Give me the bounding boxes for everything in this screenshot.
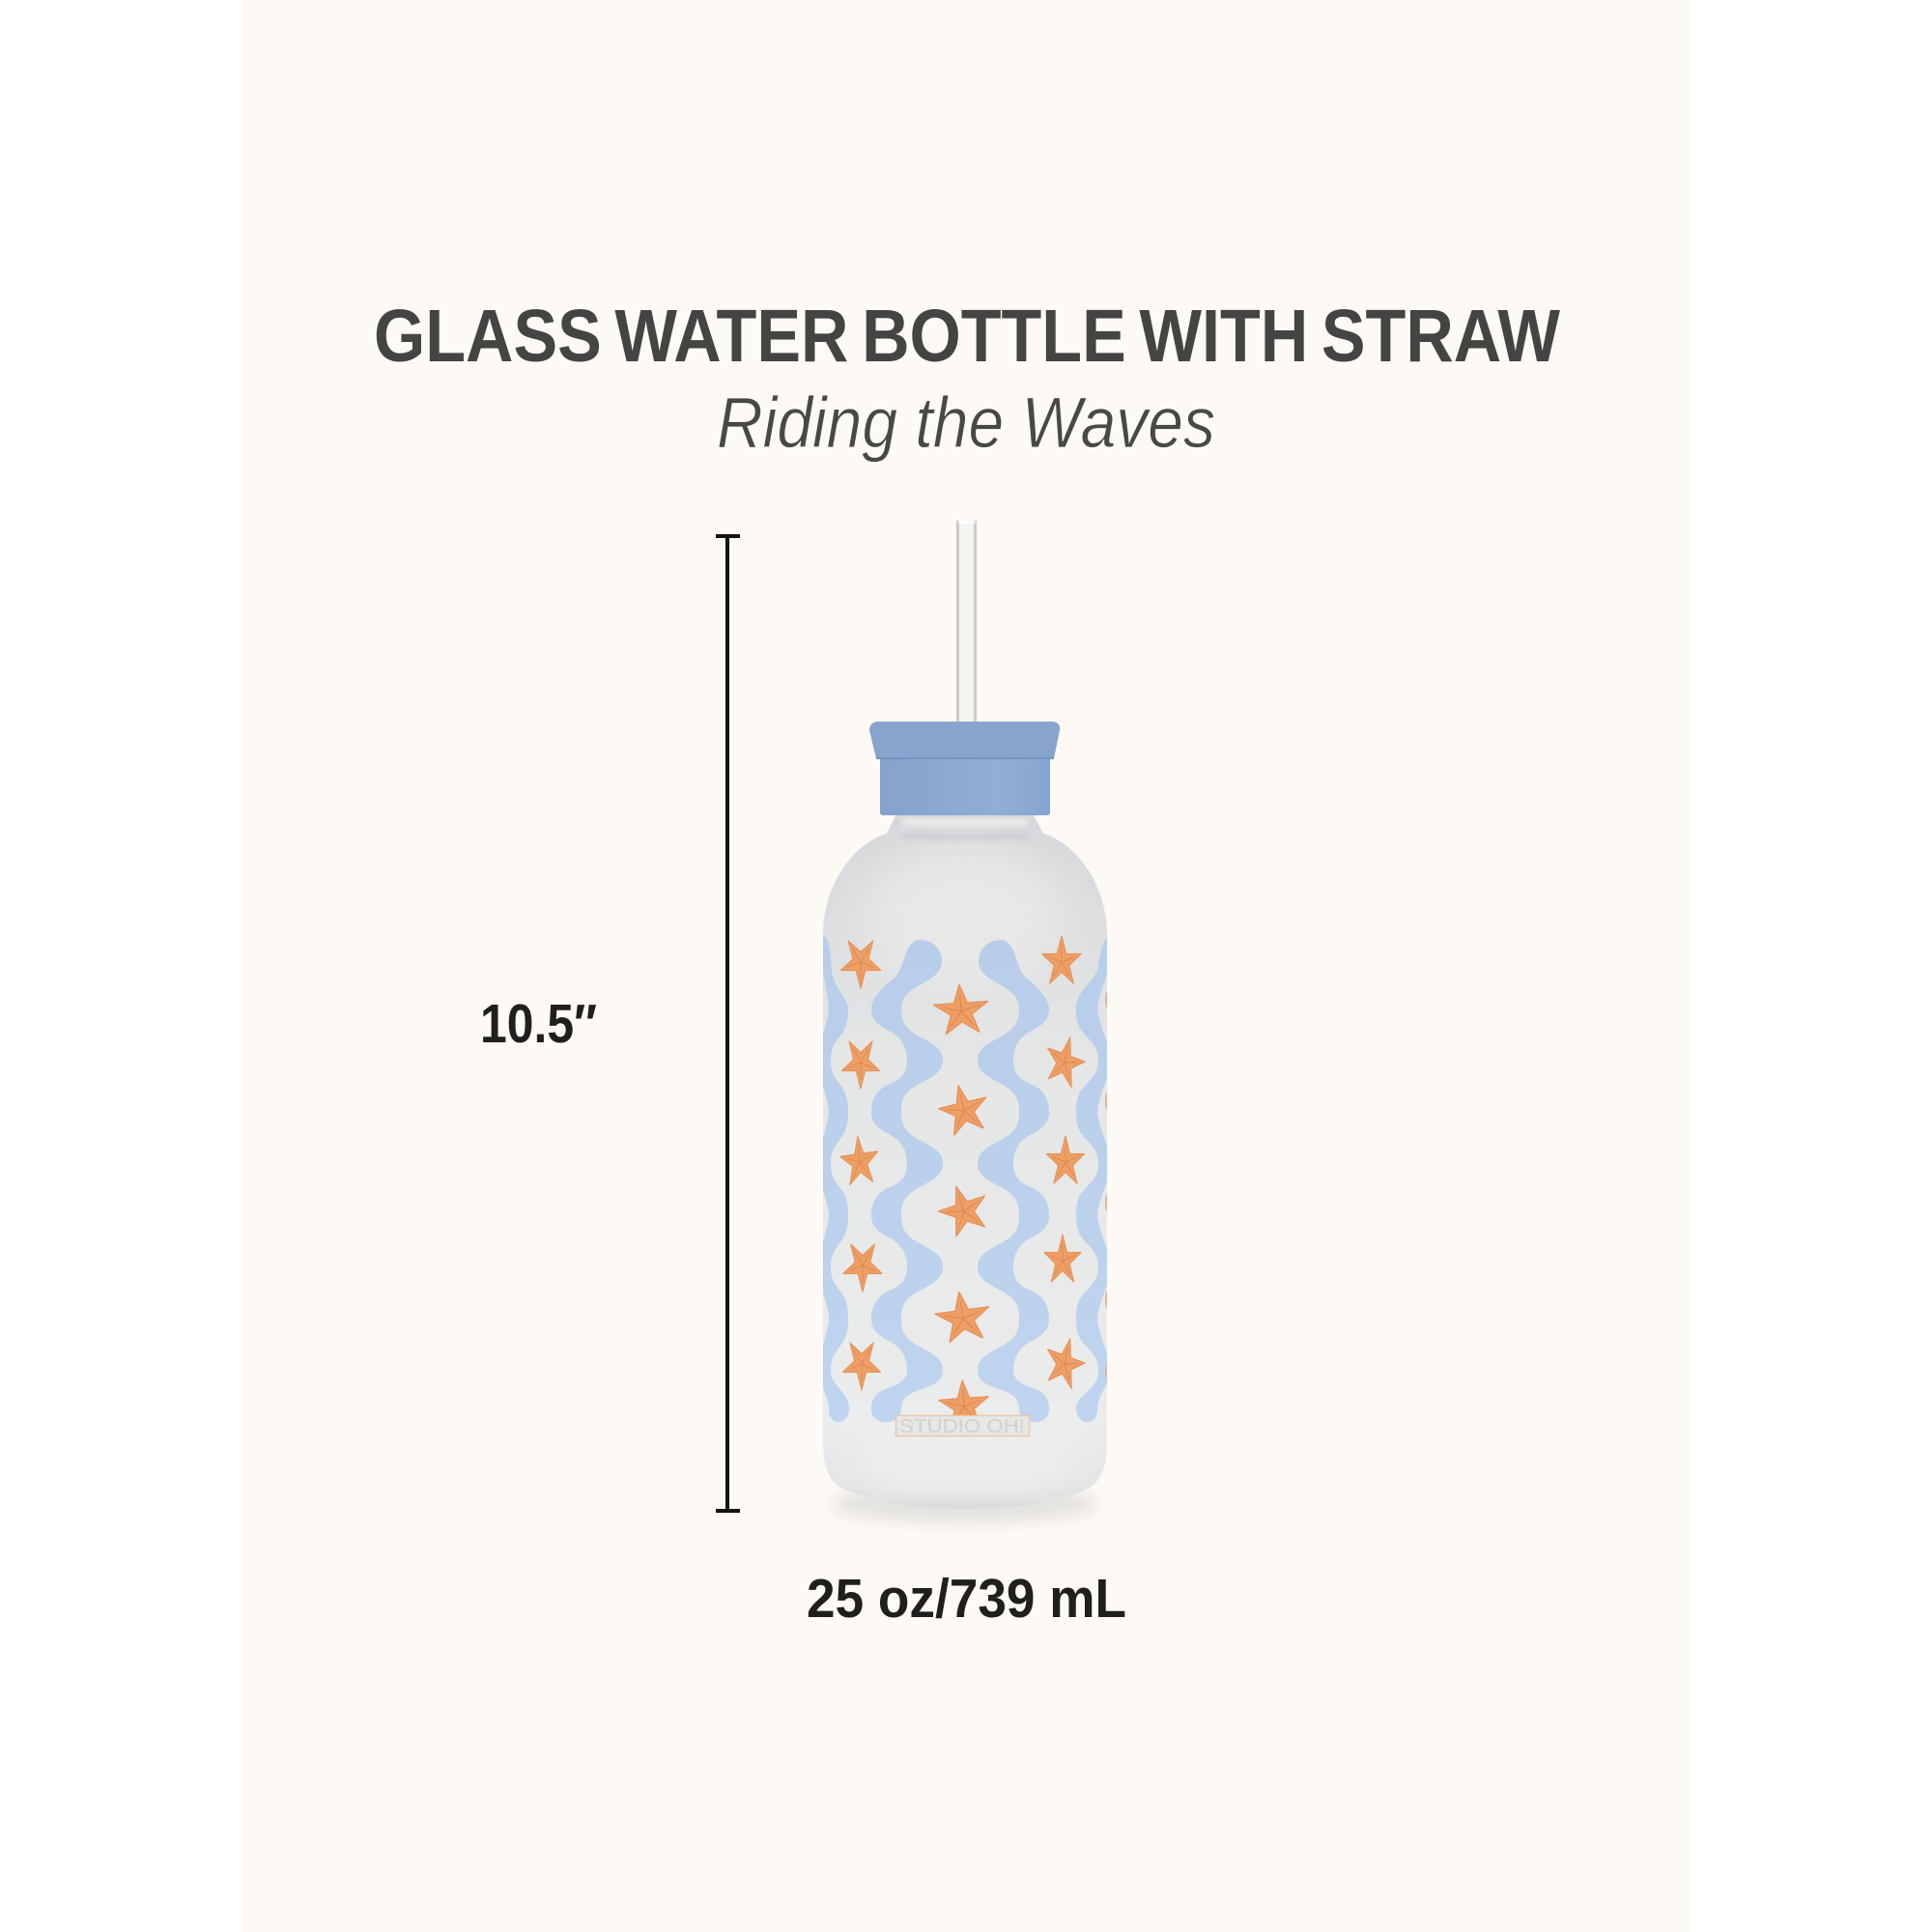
height label: 10.5″ xyxy=(480,993,597,1055)
starfish: left column xyxy=(835,926,890,1396)
starfish: right column xyxy=(1041,936,1089,1391)
height dimension line xyxy=(716,534,740,1513)
capacity label: 25 oz/739 mL xyxy=(807,1568,1126,1630)
ground shadow xyxy=(831,1485,1097,1523)
frosted glass body xyxy=(823,815,1107,1509)
wave pattern xyxy=(817,937,1116,1422)
starfish: edge slivers xyxy=(1105,992,1107,1378)
subtitle: Riding the Waves xyxy=(717,383,1215,463)
logo tag: STUDIO OH! xyxy=(899,1416,1025,1437)
title: GLASS WATER BOTTLE WITH STRAW xyxy=(374,295,1560,378)
blue lid xyxy=(869,722,1060,815)
straw xyxy=(956,521,978,722)
starfish: centre column xyxy=(932,983,993,1430)
panel: cream background xyxy=(242,0,1690,1932)
bottle xyxy=(817,521,1116,1523)
